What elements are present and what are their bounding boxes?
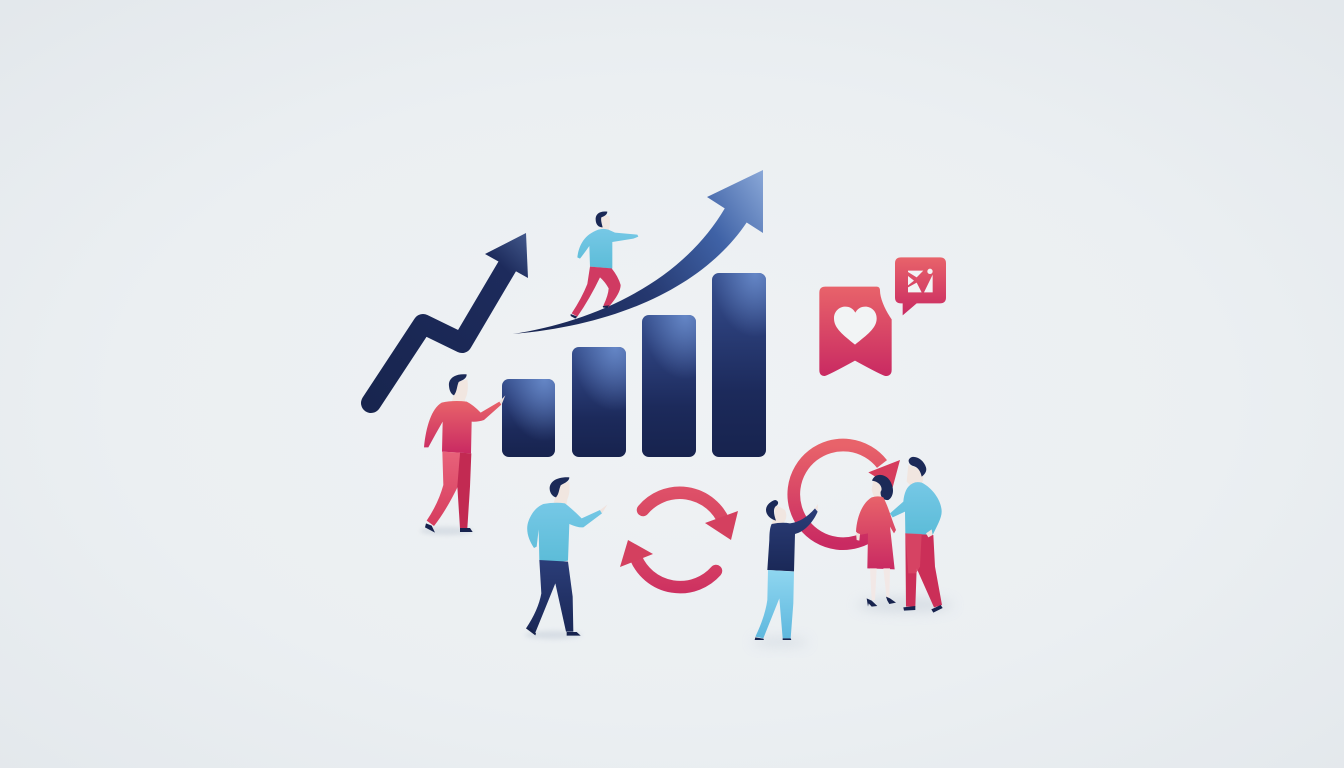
person walking on curved arrow [571,211,638,319]
person woman in red dress [856,475,896,607]
person pointing at bar (red) [420,374,505,535]
icon: heart [834,307,877,345]
icon: speech bubble [895,257,946,315]
bar chart [502,273,766,457]
person gesturing (blue shirt) [525,477,607,639]
circular arrow ring [794,445,900,544]
curved growth arrow [513,170,763,334]
shadow under couple [857,598,953,612]
circular arrows [620,493,738,587]
shadow under navy person [752,638,808,646]
person holding ring (navy shirt) [755,500,818,640]
person man in blue shirt [890,457,943,613]
zigzag growth arrow [371,233,528,403]
icon: heart bookmark [819,287,892,376]
